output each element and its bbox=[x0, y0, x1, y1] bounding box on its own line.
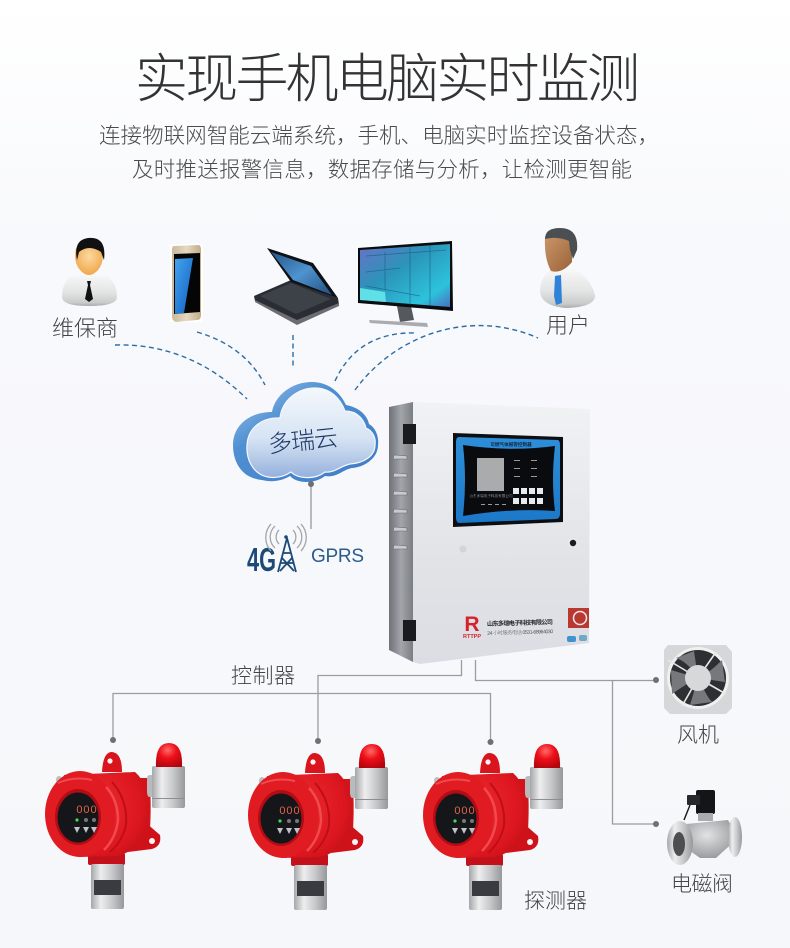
controller cabinet bbox=[389, 402, 590, 664]
label: detector: 探测器 bbox=[524, 890, 587, 913]
icon: maintainer person bbox=[62, 238, 117, 306]
logo: R bbox=[464, 613, 480, 636]
label: user: 用户 bbox=[546, 313, 590, 338]
detector 1 bbox=[45, 743, 185, 909]
label: GPRS: GPRS bbox=[311, 546, 364, 567]
detector 2: 000 bbox=[279, 805, 301, 817]
connector: cloud to 4G bbox=[308, 481, 314, 529]
subtitle text block: 及时推送报警信息，数据存储与分析，让检测更智能 bbox=[132, 158, 632, 182]
detector 3 bbox=[423, 744, 563, 910]
logo: RTTPP bbox=[463, 634, 481, 640]
subtitle text block bbox=[99, 124, 659, 182]
side slots bbox=[393, 455, 407, 549]
company name: 山东多瑞电子科技有限公司 bbox=[487, 618, 553, 628]
label: maintainer: 维保商 bbox=[52, 316, 118, 341]
icon: user person bbox=[540, 228, 595, 308]
title: 实现手机电脑实时监测 bbox=[135, 50, 640, 109]
speaker holes bbox=[460, 546, 466, 552]
dashed connections to cloud bbox=[115, 326, 538, 399]
label: solenoid valve: 电磁阀 bbox=[671, 873, 733, 896]
icon: cloud bbox=[233, 382, 378, 482]
detector 1: 000 bbox=[76, 804, 98, 816]
control panel bbox=[453, 433, 563, 527]
certification badge bbox=[567, 608, 589, 642]
detector 2 bbox=[248, 744, 388, 910]
icon: fan bbox=[664, 645, 732, 714]
wiring lines bbox=[113, 660, 656, 824]
company name: 24 小时服务电话 0531-68964030 bbox=[487, 627, 553, 637]
detector 3: 000 bbox=[454, 805, 476, 817]
label: fan: 风机 bbox=[677, 724, 719, 747]
icon: 4G tower bbox=[247, 524, 306, 578]
label: controller: 控制器 bbox=[231, 665, 295, 688]
company name bbox=[487, 618, 553, 637]
subtitle text block: 连接物联网智能云端系统，手机、电脑实时监控设备状态， bbox=[99, 124, 659, 148]
cabinet side face bbox=[389, 402, 413, 662]
cabinet front face bbox=[413, 402, 590, 664]
control panel: 山东多瑞电子科技有限公司 bbox=[469, 493, 513, 498]
keypad bbox=[513, 488, 543, 504]
indicator lights bbox=[481, 460, 537, 505]
lock bbox=[568, 538, 578, 548]
icon: smartphone bbox=[170, 244, 203, 322]
cloud label: 多瑞云 bbox=[267, 424, 339, 459]
icon: 4G tower: 4G bbox=[247, 541, 276, 578]
LCD screen bbox=[477, 458, 504, 491]
control panel: 可燃气体报警控制器 bbox=[490, 441, 532, 448]
terminal dots bbox=[110, 677, 659, 827]
icon: laptop bbox=[254, 248, 339, 325]
icon: solenoid valve bbox=[667, 790, 742, 865]
icon: desktop monitor bbox=[358, 241, 453, 327]
hinges bbox=[403, 424, 416, 641]
